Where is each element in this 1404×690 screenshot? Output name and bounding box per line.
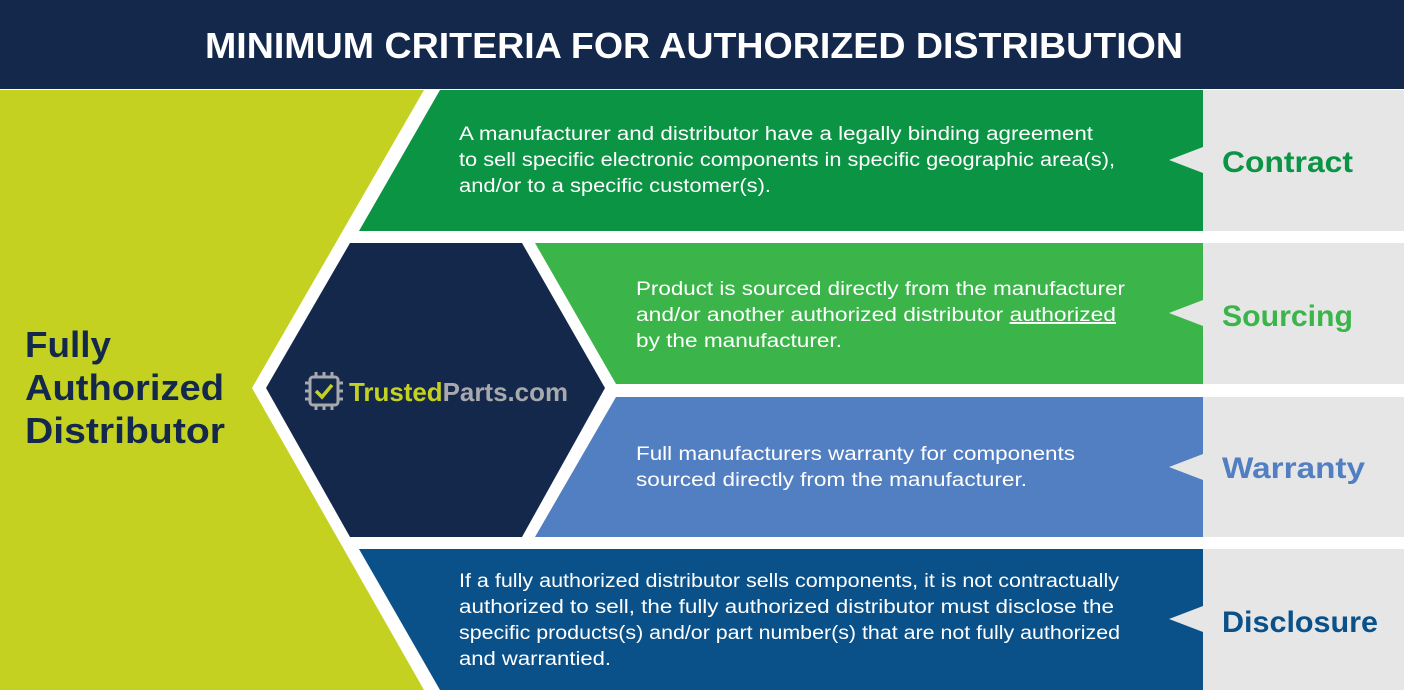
icon: chip with check xyxy=(305,372,343,410)
panel: contract: and/or to a specific customer(s). xyxy=(459,176,771,197)
panel: sourcing: and/or another authorized distributor authorized xyxy=(636,305,1098,326)
label: sourcing: Sourcing xyxy=(1222,300,1353,333)
panel: contract xyxy=(359,90,1353,231)
left panel: fully authorized distributor: Fully xyxy=(25,324,111,365)
left panel: fully authorized distributor: Authorized xyxy=(25,367,224,408)
panel: sourcing xyxy=(535,243,1353,384)
panel: warranty xyxy=(535,397,1365,537)
panel: disclosure: If a fully authorized distributor sells components, it is not contractually xyxy=(459,571,1120,592)
panel: sourcing: by the manufacturer. xyxy=(636,331,842,352)
panel: disclosure: specific products(s) and/or part number(s) that are not fully authorized xyxy=(459,623,1120,644)
left panel: fully authorized distributor: Distributor xyxy=(25,410,225,451)
panel: disclosure xyxy=(359,549,1378,690)
gray label column xyxy=(1203,90,1404,690)
panel: warranty: sourced directly from the manufacturer. xyxy=(636,470,1027,491)
panel: disclosure: authorized to sell, the fully authorized distributor must disclose the xyxy=(459,597,1114,618)
panel: warranty: Full manufacturers warranty for components xyxy=(636,444,1075,465)
panel: disclosure: and warrantied. xyxy=(459,649,611,670)
left panel: fully authorized distributor xyxy=(0,90,424,690)
panel: sourcing: Product is sourced directly from the manufacturer xyxy=(636,279,1126,300)
title: MINIMUM CRITERIA FOR AUTHORIZED DISTRIBUTION xyxy=(205,25,1183,66)
label: disclosure: Disclosure xyxy=(1222,606,1378,639)
panel: contract: A manufacturer and distributor have a legally binding agreement xyxy=(459,124,1094,145)
panel: contract: to sell specific electronic components in specific geographic area(s), xyxy=(459,150,1115,171)
label: warranty: Warranty xyxy=(1222,452,1365,485)
label: contract: Contract xyxy=(1222,146,1353,179)
header bar xyxy=(0,0,1404,89)
logo text: TrustedParts.com xyxy=(349,377,568,407)
hexagon logo xyxy=(266,243,605,537)
